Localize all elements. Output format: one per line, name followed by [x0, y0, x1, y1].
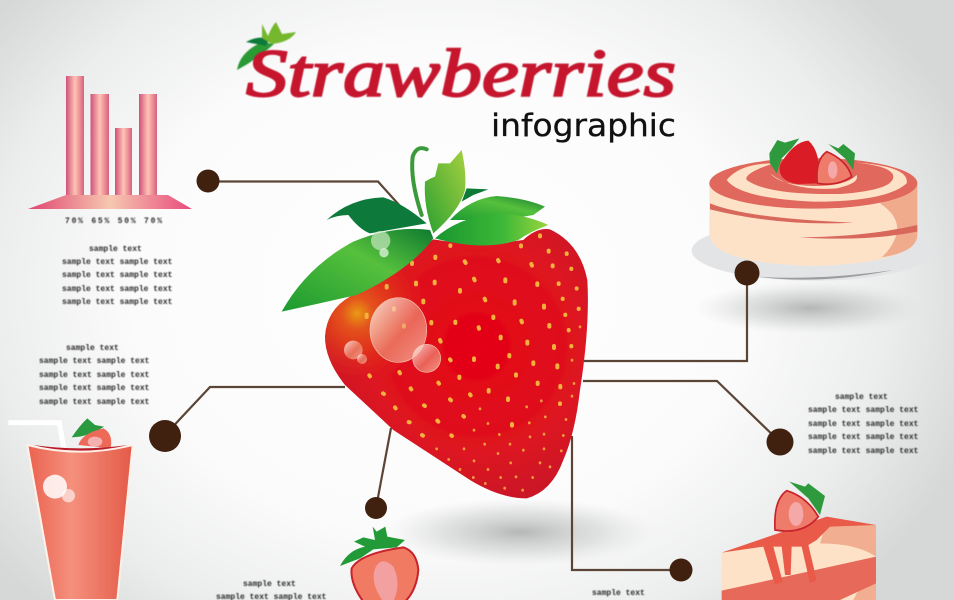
slice top shade [820, 523, 876, 600]
bar chart [28, 76, 192, 226]
text block: drink [39, 344, 150, 407]
drink surface [33, 445, 128, 452]
leaf: right upper [450, 196, 545, 220]
text block: drink: sample text sample text [39, 357, 150, 366]
cream swirl [727, 163, 907, 202]
slice strawberry [775, 491, 818, 531]
text block: top right: sample text sample text [808, 406, 919, 415]
glass bubble small [62, 489, 75, 502]
slice strawberry leaves [789, 482, 825, 515]
subtitle: infographic: infographic [491, 108, 676, 144]
dot: cake slice [670, 558, 692, 582]
water drop: large [370, 298, 427, 362]
text block: chart [62, 245, 173, 307]
slice body [722, 523, 876, 600]
berry highlight [325, 239, 490, 393]
small seeds [437, 327, 580, 490]
chart base [28, 195, 192, 209]
main strawberry [282, 148, 588, 498]
text block: bottom right: sample text [592, 589, 645, 598]
half core [828, 161, 837, 179]
water drop: on leaf small [379, 248, 389, 257]
berry body [325, 229, 588, 498]
slice body [351, 547, 418, 600]
text block: top right: sample text sample text [808, 420, 919, 429]
text block: top right: sample text sample text [808, 433, 919, 442]
drink strawberry leaves [72, 418, 104, 437]
text block: chart: sample text sample text [62, 258, 173, 267]
connector: cake [584, 273, 747, 361]
slice strawberry core [789, 502, 803, 526]
water drop: on leaf [371, 231, 390, 250]
text block: chart: sample text sample text [62, 298, 173, 307]
dot: drink [149, 420, 181, 452]
water drop: small [344, 341, 363, 359]
slice leaves [340, 527, 405, 566]
text block: drink: sample text sample text [39, 398, 150, 407]
text block: drink: sample text [66, 344, 119, 353]
water drop: medium [413, 344, 441, 372]
title: Strawberries [237, 22, 676, 111]
chart labels: 70% 65% 50% 70% [65, 217, 162, 226]
connector lines [165, 182, 780, 570]
half leaves [828, 144, 855, 170]
dot: chart [196, 170, 220, 192]
drink [8, 418, 133, 600]
slice core [374, 561, 397, 600]
bar 50% [115, 128, 132, 196]
text block: drink: sample text sample text [39, 384, 150, 393]
shadow: cake [695, 282, 925, 334]
cream ring [770, 173, 857, 189]
text block: chart: sample text [89, 245, 142, 254]
leaf: right lower [435, 213, 548, 245]
cake top [709, 158, 917, 209]
whole strawberry [780, 141, 819, 184]
connector: cake slice [572, 436, 681, 570]
cake [692, 138, 935, 281]
strawberry leaves [769, 138, 799, 173]
connector: drink [165, 387, 345, 435]
text block: top right [808, 393, 919, 456]
text block: top right: sample text sample text [808, 447, 919, 456]
text block: bottom centre: sample text [243, 580, 296, 589]
title: Strawberries: Strawberries [246, 35, 676, 111]
side stripes [710, 203, 853, 223]
text block: chart: sample text sample text [62, 271, 173, 280]
icon: title leaves [237, 22, 296, 70]
connector: chart [208, 182, 400, 206]
water drop: tiny [357, 354, 367, 364]
bar 65% [90, 94, 109, 196]
dot: sliced strawberry [365, 497, 387, 519]
leaf: small dark [462, 188, 488, 202]
glass body [27, 445, 133, 600]
text block: chart: sample text sample text [62, 285, 173, 294]
cake body [709, 183, 917, 266]
text block: bottom centre [216, 580, 327, 600]
sliced strawberry [340, 527, 418, 600]
glass bubbles [43, 475, 67, 499]
strawberry half [817, 152, 852, 184]
leaf: back dark [327, 197, 427, 233]
slice top sauce [722, 517, 876, 585]
stem [412, 148, 427, 215]
strawberry core [88, 437, 102, 447]
plate [692, 221, 935, 281]
dot: top right text [766, 428, 794, 456]
drink strawberry [78, 428, 111, 448]
leaf: big left [282, 229, 433, 312]
side stripe right [800, 225, 917, 239]
plate rim shadow [757, 270, 893, 280]
connector: sliced strawberry [376, 428, 391, 508]
shadow: strawberry [385, 498, 655, 566]
bar 70% [66, 76, 84, 196]
connector: top right text [583, 381, 780, 442]
text block: top right: sample text [835, 393, 888, 402]
leaf: top upright [425, 150, 465, 233]
seeds [367, 235, 579, 436]
dot: cake [734, 260, 760, 286]
bar 70% second [139, 94, 157, 196]
cake slice [722, 482, 876, 600]
slice stripes [722, 557, 876, 600]
cake side shade [880, 183, 917, 257]
straw [8, 423, 64, 450]
text block: drink: sample text sample text [39, 371, 150, 380]
